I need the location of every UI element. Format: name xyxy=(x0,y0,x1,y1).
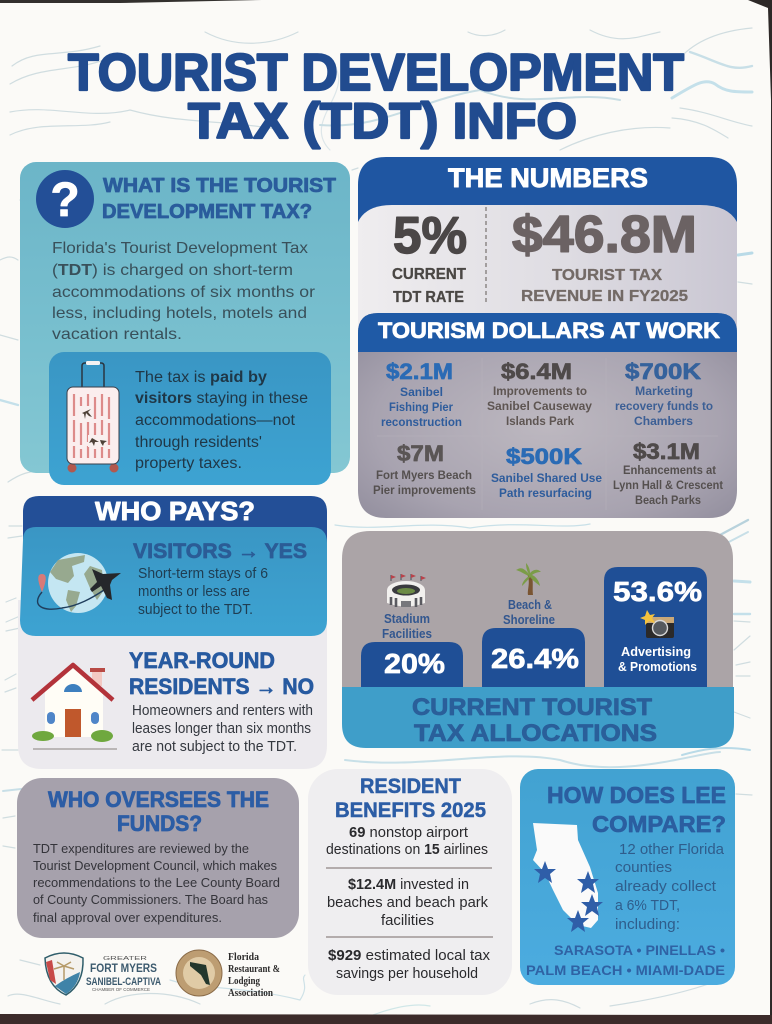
logo: greater fort myers chamber xyxy=(45,953,161,995)
text block: definition: accommodations of six months or xyxy=(52,284,316,301)
heading: how does lee compare xyxy=(547,782,726,837)
icon: suitcase xyxy=(67,361,119,472)
item: 6.4M causeway: Islands Park xyxy=(506,414,574,428)
stat: 5 percent rate: CURRENT xyxy=(392,266,466,283)
text block: county names xyxy=(526,942,725,978)
icon: question mark xyxy=(36,170,94,228)
stat: 46.8M revenue: $46.8M xyxy=(512,206,697,264)
bar: advertising and promotions 53.6 percent: & Promotions xyxy=(618,659,697,674)
heading: who oversees xyxy=(48,787,269,836)
text block: paid by visitors: accommodations—not xyxy=(135,412,296,429)
heading: current tourist tax allocations: TAX ALLOCATIONS xyxy=(414,720,657,747)
item: 7M pier: Fort Myers Beach xyxy=(376,468,472,482)
label: stadium facilities: Stadium xyxy=(384,611,430,626)
benefit: tax savings xyxy=(328,948,491,982)
benefit: airport destinations: destinations on 15 airlines xyxy=(326,842,488,858)
text block: county names: SARASOTA • PINELLAS • xyxy=(554,942,725,958)
item: 3.1M beach parks xyxy=(613,439,723,507)
text block: paid by visitors: visitors staying in these xyxy=(135,390,308,407)
logo: florida restaurant and lodging association: Restaurant & xyxy=(228,963,280,975)
heading: what is the tax: DEVELOPMENT TAX? xyxy=(102,201,312,223)
dark photo background edge: right xyxy=(748,0,772,1024)
panel: who pays xyxy=(18,496,327,769)
logo: florida restaurant and lodging association xyxy=(176,950,280,999)
item: 2.1M fishing pier: reconstruction xyxy=(381,415,462,429)
stat: 46.8M revenue: REVENUE IN FY2025 xyxy=(521,288,688,305)
panel: resident benefits 2025 xyxy=(308,769,512,995)
text block: definition: vacation rentals. xyxy=(52,326,182,343)
text block: visitors yes: VISITORS → YES xyxy=(133,540,307,563)
panel: what is the tourist development tax xyxy=(20,162,350,485)
icon: house xyxy=(32,665,117,749)
text block: definition: less, including hotels, motels and xyxy=(52,305,307,322)
text block: visitors yes: Short-term stays of 6 xyxy=(138,566,268,582)
stat: 46.8M revenue: TOURIST TAX xyxy=(552,267,662,284)
panel: tourism dollars at work xyxy=(358,313,737,518)
benefit: airport destinations: 69 nonstop airport xyxy=(349,825,468,841)
icon: globe and plane xyxy=(38,553,121,613)
text block: visitors yes: months or less are xyxy=(138,584,250,600)
item: 700K marketing xyxy=(615,359,713,428)
heading: tourism dollars at work: TOURISM DOLLARS AT WORK xyxy=(378,318,720,343)
item: 2.1M fishing pier: $2.1M xyxy=(386,359,453,384)
heading: current tourist tax allocations: CURRENT TOURIST xyxy=(412,694,652,721)
item: 7M pier: $7M xyxy=(397,441,444,466)
item: 7M pier: Pier improvements xyxy=(373,483,476,497)
heading: what is the tax: WHAT IS THE TOURIST xyxy=(103,175,336,197)
text block: definition: (TDT) is charged on short-term xyxy=(52,262,293,279)
text block: year-round residents no: are not subject to the TDT. xyxy=(132,739,297,755)
text block: paid by visitors: property taxes. xyxy=(135,455,242,472)
text block: other counties xyxy=(615,841,725,933)
heading: resident benefits: RESIDENT xyxy=(360,775,461,798)
text block: paid by visitors: The tax is paid by xyxy=(135,369,267,386)
logo: greater fort myers chamber: GREATER xyxy=(103,956,148,962)
benefit: beach investment: $12.4M invested in xyxy=(348,877,469,893)
text block: definition: Florida's Tourist Development Tax xyxy=(52,240,308,257)
label: beach and shoreline: Beach & xyxy=(508,597,552,612)
text block: other counties: counties xyxy=(615,859,672,876)
item: 500K shared use path: Path resurfacing xyxy=(499,486,592,500)
heading: resident benefits: BENEFITS 2025 xyxy=(335,799,486,822)
text block: year-round residents no: YEAR-ROUND xyxy=(129,648,275,673)
callout: paid by visitors xyxy=(49,352,331,485)
bar: beach and shoreline 26.4 percent: 26.4% xyxy=(491,643,579,674)
title: TOURIST DEVELOPMENT xyxy=(68,44,684,102)
panel: how does lee compare xyxy=(520,769,735,985)
map: florida with stars xyxy=(533,823,603,932)
text block: other counties: including: xyxy=(615,916,680,933)
bar: beach and shoreline 26.4 percent xyxy=(482,628,585,687)
item: 3.1M beach parks: Lynn Hall & Crescent xyxy=(613,478,723,492)
text block: year-round residents no: leases longer than six months xyxy=(132,721,311,737)
text block: oversight: of County Commissioners. The Board has xyxy=(33,893,268,907)
text block: paid by visitors xyxy=(135,369,308,472)
heading: resident benefits xyxy=(335,775,486,822)
item: 500K shared use path: Sanibel Shared Use xyxy=(491,471,602,485)
logo: florida restaurant and lodging association: Florida xyxy=(228,951,259,963)
heading: the numbers: THE NUMBERS xyxy=(448,163,648,193)
benefit: beach investment: beaches and beach park xyxy=(327,895,489,911)
heading: who oversees: WHO OVERSEES THE xyxy=(48,787,269,812)
item: 700K marketing: Chambers xyxy=(634,414,693,428)
item: 6.4M causeway: Improvements to xyxy=(493,384,587,398)
item: 500K shared use path xyxy=(491,444,602,500)
heading: what is the tax xyxy=(102,175,336,223)
panel: visitors yes xyxy=(20,527,327,636)
stat: 5 percent rate: 5% xyxy=(393,207,467,265)
heading: current tourist tax allocations xyxy=(412,694,657,747)
text block: visitors yes xyxy=(133,540,307,618)
panel: current tourist tax allocations xyxy=(342,531,734,748)
item: 2.1M fishing pier: Fishing Pier xyxy=(389,400,453,414)
bar: advertising and promotions 53.6 percent: 53.6% xyxy=(613,576,702,607)
logo: greater fort myers chamber: CHAMBER OF COMMERCE xyxy=(92,987,150,992)
text block: oversight xyxy=(33,842,280,925)
text block: paid by visitors: through residents' xyxy=(135,434,262,451)
title xyxy=(68,44,684,149)
dark photo background edge: bottom xyxy=(0,1014,772,1024)
label: stadium facilities: Facilities xyxy=(382,626,432,641)
benefit: airport destinations xyxy=(326,825,488,858)
item: 6.4M causeway: $6.4M xyxy=(501,359,572,384)
heading: who oversees: FUNDS? xyxy=(117,811,202,836)
item: 2.1M fishing pier: Sanibel xyxy=(400,385,443,399)
bar: advertising and promotions 53.6 percent: Advertising xyxy=(621,644,691,659)
bar: stadium facilities 20 percent xyxy=(361,642,463,687)
icon: camera xyxy=(640,610,674,638)
bar: stadium facilities 20 percent: 20% xyxy=(384,648,445,679)
text block: definition xyxy=(52,240,316,343)
title: TAX (TDT) INFO xyxy=(188,93,577,149)
stat: 46.8M revenue xyxy=(512,206,697,305)
text block: visitors yes: subject to the TDT. xyxy=(138,602,253,618)
item: 500K shared use path: $500K xyxy=(506,444,582,469)
item: 3.1M beach parks: Beach Parks xyxy=(635,493,701,507)
benefit: tax savings: $929 estimated local tax xyxy=(328,948,491,964)
panel: who oversees the funds xyxy=(17,778,299,938)
icon: palm tree xyxy=(516,563,541,595)
benefit: beach investment xyxy=(327,877,489,929)
logo: florida restaurant and lodging association: Lodging xyxy=(228,975,260,987)
panel: the numbers xyxy=(358,157,737,518)
heading: how does lee compare: COMPARE? xyxy=(592,811,726,837)
benefit: beach investment: facilities xyxy=(381,913,434,929)
text block: county names: PALM BEACH • MIAMI-DADE xyxy=(526,962,725,978)
item: 700K marketing: Marketing xyxy=(635,384,693,398)
text block: oversight: TDT expenditures are reviewed by the xyxy=(33,842,249,856)
dark photo background edge: top xyxy=(0,0,262,3)
benefit: tax savings: savings per household xyxy=(336,966,478,982)
item: 700K marketing: $700K xyxy=(625,359,701,384)
text block: oversight: final approval over expenditures. xyxy=(33,911,222,925)
text block: other counties: 12 other Florida xyxy=(619,841,725,858)
text block: year-round residents no: Homeowners and renters with xyxy=(132,703,313,719)
logo: florida restaurant and lodging association: Association xyxy=(228,987,273,999)
text block: oversight: Tourist Development Council, which makes xyxy=(33,859,277,873)
item: 2.1M fishing pier xyxy=(381,359,462,429)
item: 3.1M beach parks: Enhancements at xyxy=(623,463,716,477)
text block: oversight: recommendations to the Lee County Board xyxy=(33,876,280,890)
icon: question mark: ? xyxy=(50,174,80,227)
label: beach and shoreline xyxy=(503,597,555,627)
item: 6.4M causeway xyxy=(487,359,592,428)
label: stadium facilities xyxy=(382,611,432,641)
item: 6.4M causeway: Sanibel Causeway xyxy=(487,399,592,413)
text block: other counties: a 6% TDT, xyxy=(615,897,680,914)
item: 3.1M beach parks: $3.1M xyxy=(633,439,700,464)
icon: stadium xyxy=(387,574,426,607)
logo: greater fort myers chamber: FORT MYERS xyxy=(90,961,157,975)
heading: how does lee compare: HOW DOES LEE xyxy=(547,782,726,808)
stat: 5 percent rate xyxy=(392,207,467,306)
text block: year-round residents no: RESIDENTS → NO xyxy=(129,674,314,699)
label: beach and shoreline: Shoreline xyxy=(503,612,555,627)
bar: advertising and promotions 53.6 percent xyxy=(604,567,707,687)
text block: other counties: already collect xyxy=(615,878,717,895)
text block: year-round residents no xyxy=(129,648,314,755)
item: 7M pier xyxy=(373,441,476,497)
logo: greater fort myers chamber: SANIBEL-CAPTIVA xyxy=(86,976,161,988)
stat: 5 percent rate: TDT RATE xyxy=(393,289,464,306)
item: 700K marketing: recovery funds to xyxy=(615,399,713,413)
heading: who pays: WHO PAYS? xyxy=(95,496,255,526)
